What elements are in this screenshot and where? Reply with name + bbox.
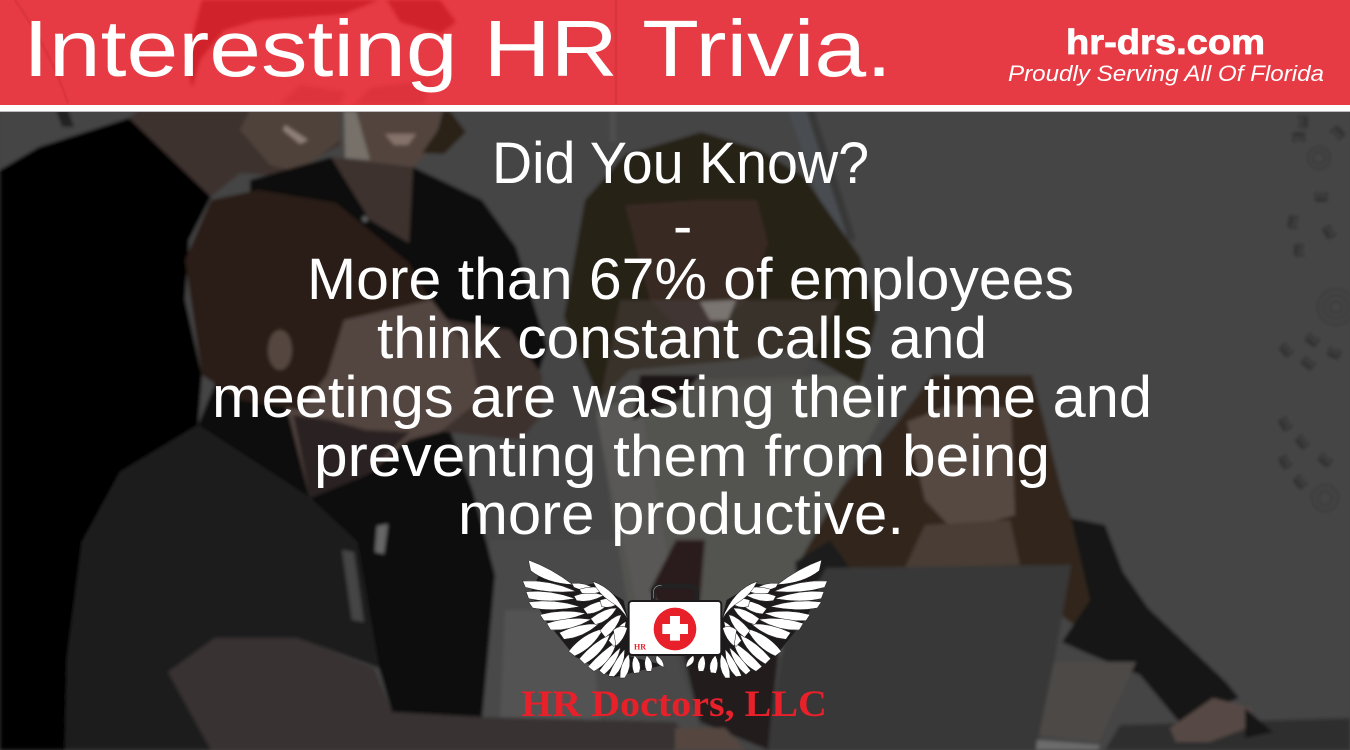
main trivia text: more productive. xyxy=(458,482,904,547)
logo: winged medical case xyxy=(521,560,827,725)
front man: hair, face, tee, arm xyxy=(258,298,480,498)
logo wordmark: HR Doctors, LLC xyxy=(521,684,827,725)
notebook on desk xyxy=(1039,662,1136,742)
forearm of second man xyxy=(420,315,542,440)
back-left man xyxy=(129,110,340,197)
banner title: Interesting HR Trivia. xyxy=(23,4,892,93)
tagline: Proudly Serving All Of Florida xyxy=(1008,61,1324,86)
main trivia text: preventing them from being xyxy=(314,424,1050,489)
eye chart wall pattern xyxy=(1276,112,1348,493)
main trivia text: think constant calls and xyxy=(377,306,987,371)
window frame xyxy=(56,110,74,127)
eye chart wall pattern: E xyxy=(1324,345,1345,362)
eye chart wall pattern: E xyxy=(1314,450,1336,471)
laptop xyxy=(768,565,1071,750)
eye chart wall pattern: E xyxy=(1301,330,1323,350)
eye chart wall pattern: E xyxy=(1292,431,1313,453)
eye chart wall pattern: E xyxy=(1276,339,1297,361)
website address: hr-drs.com xyxy=(1066,23,1265,62)
eye chart wall pattern: E xyxy=(1286,212,1300,233)
lower middle background clutter xyxy=(480,540,700,730)
main trivia text: Did You Know? xyxy=(492,131,869,196)
main trivia text: More than 67% of employees xyxy=(307,247,1074,312)
main trivia text: meetings are wasting their time and xyxy=(212,365,1152,430)
second man xyxy=(344,111,443,167)
eye chart wall pattern: E xyxy=(1289,131,1308,143)
main trivia text: - xyxy=(673,194,692,259)
main trivia text xyxy=(212,131,1152,547)
eye chart wall pattern: E xyxy=(1276,413,1295,435)
header banner xyxy=(0,0,1350,112)
eye chart wall pattern: E xyxy=(1297,112,1309,131)
desk and hand xyxy=(1105,718,1350,750)
eye chart wall pattern: E xyxy=(1293,241,1305,260)
eye chart wall pattern: E xyxy=(1312,191,1331,203)
logo: winged medical case: HR xyxy=(634,643,646,652)
eye chart wall pattern: E xyxy=(1327,122,1348,143)
eye chart wall pattern: E xyxy=(1290,471,1311,493)
centre woman xyxy=(596,375,880,660)
eye chart wall pattern: E xyxy=(1276,451,1295,473)
eye chart wall pattern: E xyxy=(1320,221,1339,243)
right woman xyxy=(795,375,1095,640)
eye chart wall pattern: E xyxy=(1297,353,1319,374)
